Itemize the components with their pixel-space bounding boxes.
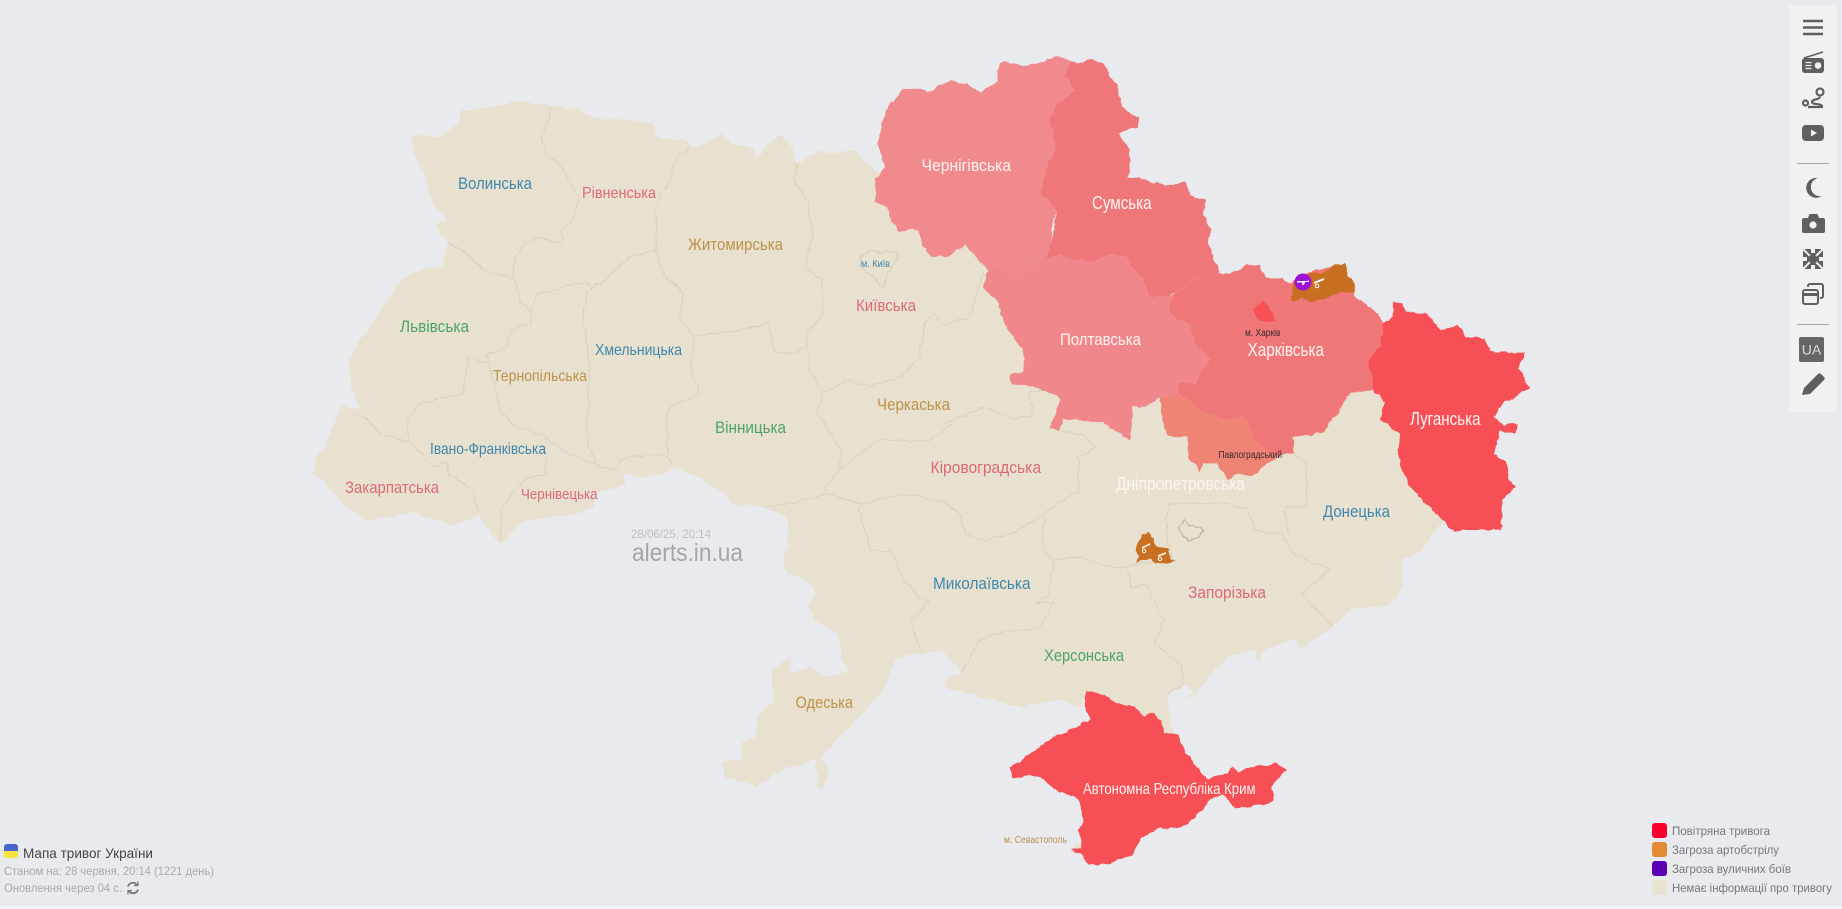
- label Volyn: Волинська: [458, 174, 532, 193]
- icon: windows: [1803, 284, 1823, 304]
- Kyiv city outline: [860, 250, 897, 288]
- watermark date: 28/06/25, 20:14: [631, 527, 711, 541]
- icon: artillery markers: [1142, 544, 1166, 561]
- watermark site: alerts.in.ua: [632, 539, 743, 567]
- icon: video: [1802, 125, 1824, 141]
- Sevastopol: [1071, 843, 1082, 849]
- label Khmelnytskyi: Хмельницька: [595, 342, 682, 359]
- toolbar panel: [1789, 5, 1837, 412]
- region labels: [345, 156, 1481, 846]
- label Kharkiv oblast: Харківська: [1248, 340, 1325, 360]
- Kharkiv city: [1253, 300, 1276, 323]
- region: Pavlohrad district: [1159, 393, 1282, 480]
- label Kyiv oblast: Київська: [856, 296, 916, 315]
- label Cherkasy: Черкаська: [877, 395, 950, 414]
- region: Crimea: [1010, 691, 1288, 865]
- legend: artillery: Загроза артобстрілу: [1672, 843, 1779, 857]
- icon: pencil: [1802, 373, 1825, 395]
- legend: [1652, 823, 1832, 895]
- legend: air alert: Повітряна тривога: [1672, 824, 1770, 838]
- label Sevastopol: м. Севастополь: [1004, 835, 1067, 846]
- label Donetsk: Донецька: [1323, 502, 1390, 521]
- label Zaporizhzhia: Запорізька: [1188, 583, 1266, 602]
- Zaporizhzhia city outline: [1178, 520, 1203, 540]
- label Kyiv city: м. Київ: [861, 258, 890, 270]
- beige land: centre-east: [900, 300, 1445, 560]
- label Vinnytsia: Вінницька: [715, 418, 786, 437]
- label Zhytomyr: Житомирська: [688, 235, 783, 254]
- region: Luhansk: [1369, 302, 1530, 532]
- region: Kharkiv: [1168, 263, 1383, 455]
- icon: fullscreen: [1803, 249, 1823, 269]
- label Crimea: Автономна Республіка Крим: [1083, 781, 1256, 798]
- site title: Мапа тривог України: [23, 845, 153, 861]
- oblast borders: south: [764, 490, 1334, 695]
- label Sumy: Сумська: [1092, 193, 1152, 213]
- label Pavlohrad: Павлоградський: [1218, 450, 1282, 461]
- beige land: west: [314, 102, 1020, 560]
- map of Ukraine: [314, 57, 1530, 865]
- legend: no information: Немає інформації про тривогу: [1672, 881, 1832, 895]
- label Poltava: Полтавська: [1060, 330, 1141, 349]
- watermark: [631, 527, 743, 567]
- info block: [4, 844, 214, 895]
- icon: refresh: [128, 882, 138, 894]
- icon: artillery marker: [1314, 279, 1324, 288]
- update countdown: Оновлення через 04 с.: [4, 881, 122, 895]
- region: Chernihiv: [876, 57, 1077, 273]
- label Luhansk: Луганська: [1410, 409, 1481, 429]
- icon: moon: [1806, 178, 1822, 198]
- flag icon: [4, 844, 18, 858]
- status date: Станом на: 28 червня, 20:14 (1221 день): [4, 864, 214, 878]
- label Ternopil: Тернопільська: [493, 368, 587, 385]
- icon: route: [1803, 88, 1824, 107]
- oblast borders: centre-east: [945, 390, 1306, 533]
- label Zakarpattia: Закарпатська: [345, 478, 439, 497]
- label Mykolaiv: Миколаївська: [933, 574, 1031, 593]
- icon: street fighting marker: [1294, 274, 1312, 290]
- legend: street fighting: Загроза вуличних боїв: [1672, 862, 1791, 876]
- label Odesa: Одеська: [796, 693, 853, 712]
- region: Sumy: [1041, 58, 1219, 298]
- icon: radio: [1802, 52, 1824, 73]
- icon: language: UA: [1802, 342, 1822, 358]
- label Lviv: Львівська: [400, 317, 469, 336]
- label Chernivtsi: Чернівецька: [521, 486, 598, 503]
- icon: language: [1799, 337, 1824, 362]
- artillery zone: north Kharkiv: [1291, 263, 1355, 302]
- icon: menu: [1803, 21, 1823, 34]
- label Dnipropetrovsk: Дніпропетровська: [1116, 474, 1246, 494]
- label Kirovohrad: Кіровоградська: [930, 458, 1041, 477]
- beige land: south: [702, 480, 1420, 789]
- label Kharkiv city: м. Харків: [1245, 327, 1281, 339]
- label Kherson: Херсонська: [1044, 646, 1124, 665]
- label Ivano-Frankivsk: Івано-Франківська: [430, 441, 546, 458]
- label Chernihiv: Чернігівська: [922, 156, 1011, 175]
- label Rivne: Рівненська: [582, 185, 656, 202]
- region: Poltava: [983, 255, 1210, 440]
- artillery zone: Dnipro south: [1136, 532, 1176, 564]
- icon: camera: [1802, 214, 1825, 233]
- oblast borders: west: [362, 107, 984, 542]
- map regions: [314, 57, 1530, 865]
